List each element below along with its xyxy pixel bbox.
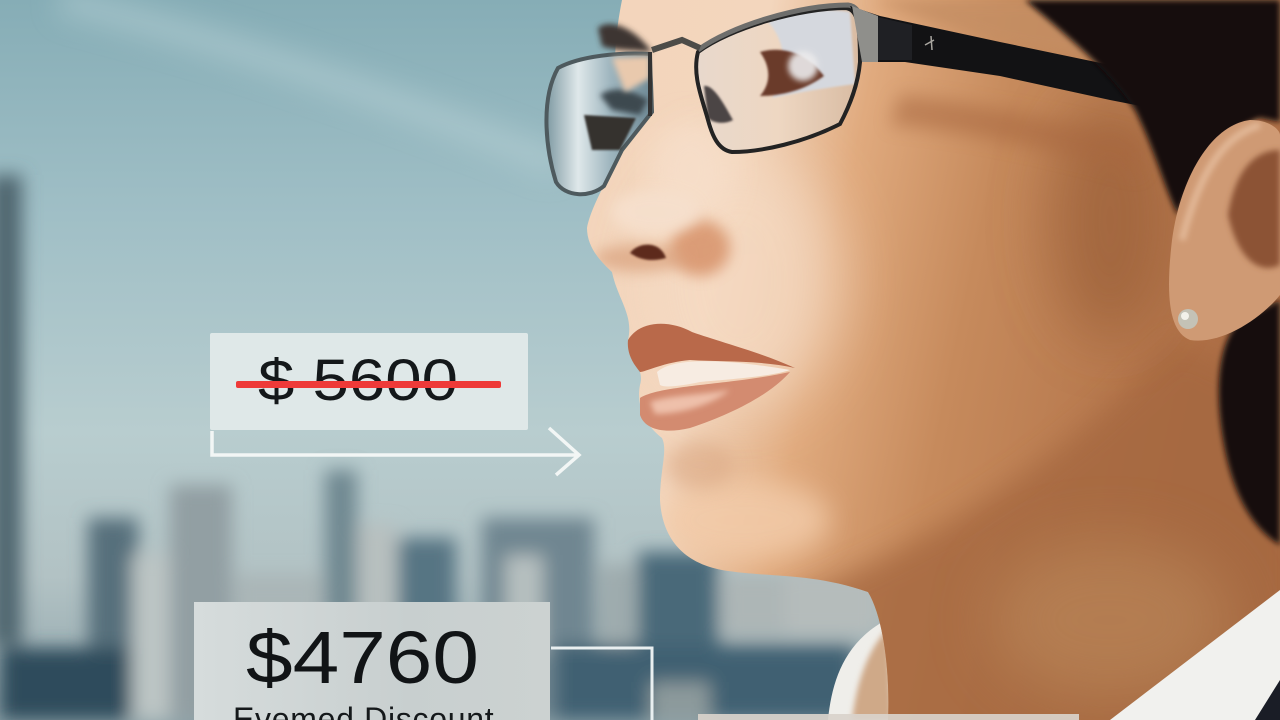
bottom card edge bbox=[698, 714, 1079, 720]
ear and earring bbox=[1169, 120, 1280, 341]
discounted price text: $4760 bbox=[246, 616, 479, 699]
connector line bbox=[551, 648, 652, 720]
face and neck skin bbox=[546, 0, 1280, 720]
red strikethrough bbox=[236, 381, 501, 388]
near lens bbox=[696, 8, 860, 152]
glasses frame near bbox=[696, 8, 860, 152]
eyebrow behind bbox=[598, 24, 652, 52]
glasses temple arm bbox=[850, 6, 1172, 112]
neck shadow under jaw bbox=[802, 358, 1206, 720]
price card: discounted price bbox=[194, 602, 550, 720]
far lens bbox=[546, 54, 652, 194]
old price text: $ 5600 bbox=[258, 348, 458, 413]
price card: old price bbox=[210, 333, 528, 430]
shirt collar right bbox=[1110, 590, 1280, 720]
hair bbox=[1025, 0, 1280, 545]
arrow: old to new price bbox=[212, 428, 579, 475]
nose bbox=[670, 220, 730, 276]
shirt collar bbox=[828, 618, 898, 720]
mouth: lips and teeth bbox=[628, 324, 795, 431]
